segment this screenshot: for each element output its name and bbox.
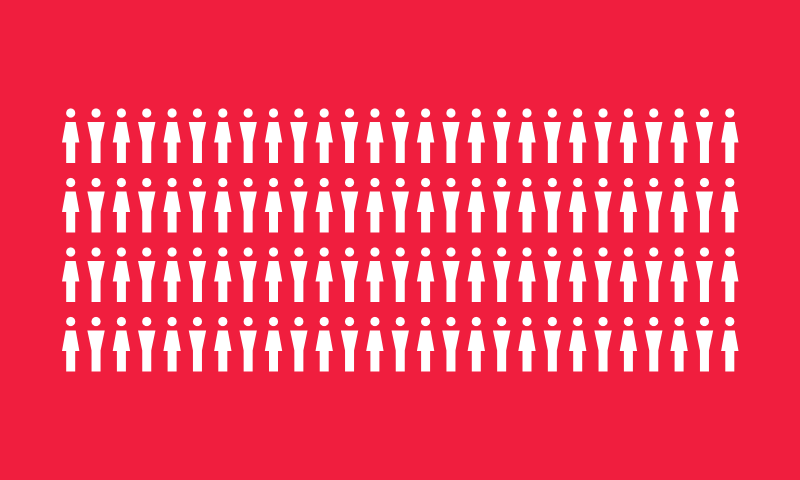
figure row 1: [62, 108, 738, 163]
figure row 4: [62, 317, 738, 372]
figure row 3: [62, 247, 738, 302]
figure row 2: [62, 178, 738, 232]
